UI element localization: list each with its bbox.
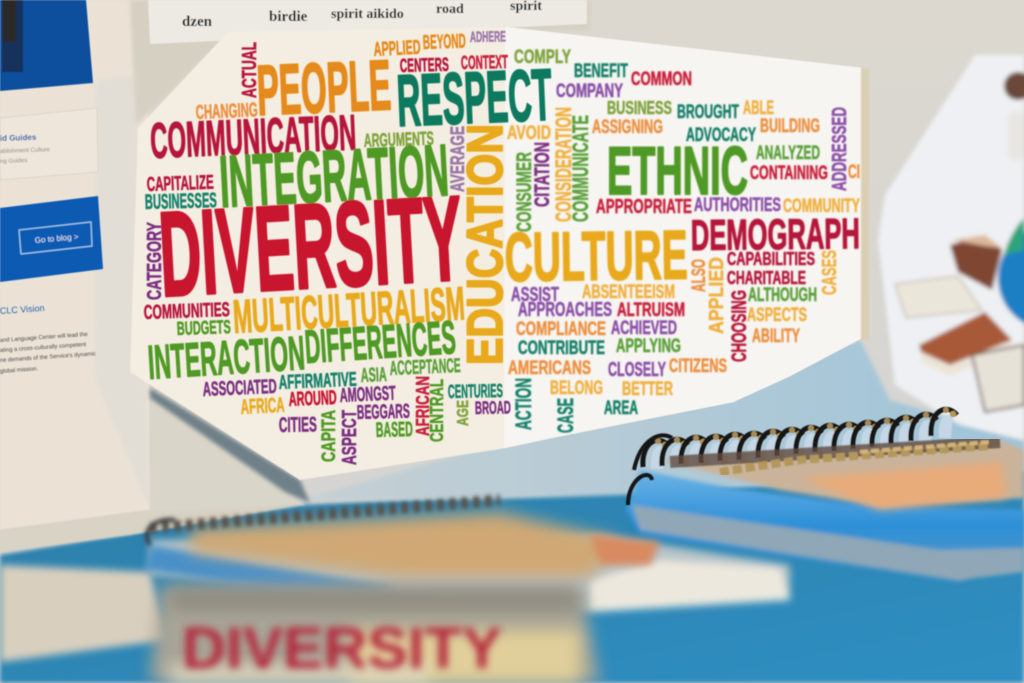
word: BROAD: BROAD — [475, 397, 511, 418]
word: BEYOND: BEYOND — [422, 31, 466, 54]
word cloud: left half — [143, 28, 554, 465]
shaded wall below poster — [300, 340, 1024, 500]
word: ETHNIC: ETHNIC — [607, 133, 748, 209]
word: CENTRAL: CENTRAL — [427, 379, 447, 442]
vision text: global mission. — [0, 366, 39, 375]
word: CONSIDERATION: CONSIDERATION — [551, 107, 576, 222]
word: EDUCATION: EDUCATION — [457, 124, 513, 365]
word: ADDRESSED: ADDRESSED — [829, 107, 851, 191]
word: ADHERE: ADHERE — [470, 28, 506, 46]
blurred word: DIVERSITY: DIVERSITY — [182, 616, 502, 681]
word: AMERICANS: AMERICANS — [508, 358, 591, 379]
word: CITIES: CITIES — [279, 413, 317, 437]
word: BELONG: BELONG — [550, 378, 603, 399]
word: AVERAGE: AVERAGE — [448, 126, 469, 192]
word cloud: left half: INTERACTION — [146, 327, 306, 390]
word: BUILDING: BUILDING — [760, 116, 820, 137]
right spiral notebook — [626, 407, 1024, 582]
icon: open white book — [895, 276, 982, 318]
word: CASES: CASES — [819, 250, 841, 295]
word: CLOSELY: CLOSELY — [608, 359, 666, 381]
word: ASSOCIATED: ASSOCIATED — [202, 376, 277, 401]
word: COMMUNITIES: COMMUNITIES — [143, 299, 230, 324]
word cloud: left half: DIVERSITY — [156, 171, 466, 322]
word cloud: left half: DIFFERENCES — [303, 310, 457, 373]
word: CONTRIBUTE: CONTRIBUTE — [518, 338, 605, 359]
word: ABILITY: ABILITY — [752, 326, 800, 347]
blog button panel: Go to blog > — [34, 232, 79, 245]
word: CHANGING: CHANGING — [195, 99, 258, 124]
word: CHOOSING: CHOOSING — [728, 290, 751, 362]
word: ASSIGNING: ASSIGNING — [592, 117, 663, 138]
word: COMMUNITY: COMMUNITY — [783, 196, 860, 217]
word: AMONGST: AMONGST — [339, 383, 396, 407]
word: CENTURIES: CENTURIES — [448, 381, 503, 403]
word: AGE: AGE — [455, 400, 472, 426]
word: APPROACHES: APPROACHES — [518, 299, 612, 321]
word: COMPANY: COMPANY — [556, 81, 623, 102]
label strip of names: road — [436, 2, 464, 17]
word: CONSUMER: CONSUMER — [513, 152, 536, 232]
word: AREA: AREA — [604, 398, 638, 419]
word: ABLE: ABLE — [743, 98, 774, 119]
word: ASPECT: ASPECT — [339, 410, 361, 465]
vision text: ne demands of the Service's dynamic — [0, 351, 96, 364]
word: AVOID: AVOID — [507, 123, 551, 144]
word: AROUND: AROUND — [288, 387, 337, 411]
word: CAPITA: CAPITA — [319, 410, 340, 462]
word: BROUGHT: BROUGHT — [677, 102, 739, 123]
label strip of names: spirit aikido — [331, 7, 404, 22]
icon: red book — [919, 312, 1012, 376]
word cloud: left half: COMMUNICATION — [149, 104, 357, 169]
word: CONTAINING: CONTAINING — [750, 163, 828, 184]
icon: person — [1004, 72, 1024, 160]
word: APPROPRIATE: APPROPRIATE — [596, 196, 692, 218]
word: CENTERS: CENTERS — [400, 55, 449, 77]
guides box — [0, 108, 98, 180]
foreground notebook with blurred red title — [150, 585, 600, 683]
word: BEGGARS: BEGGARS — [357, 401, 410, 424]
word: ALTHOUGH: ALTHOUGH — [748, 285, 817, 306]
label strip of names — [148, 0, 587, 44]
blue cover stripe — [145, 545, 400, 600]
word: ACTUAL: ACTUAL — [239, 42, 261, 98]
spiral coils — [643, 407, 957, 469]
icon: green globe land — [1004, 218, 1024, 255]
word: BASED: BASED — [376, 418, 413, 442]
text: RESPECT — [395, 55, 554, 142]
foreground beige sheet, blurred — [0, 565, 168, 662]
vision text: and Language Center will lead the — [0, 332, 88, 344]
word: BUSINESSES: BUSINESSES — [145, 189, 217, 214]
vision text: CLC Vision — [0, 303, 45, 316]
word: AFRICA: AFRICA — [240, 394, 285, 419]
word: DEMOGRAPH: DEMOGRAPH — [691, 210, 860, 260]
word: CAPITALIZE: CAPITALIZE — [146, 172, 214, 196]
vision text — [0, 303, 96, 375]
word: ARGUMENTS: ARGUMENTS — [363, 129, 434, 152]
orange patch — [590, 535, 660, 565]
word: ANALYZED: ANALYZED — [756, 143, 820, 164]
word cloud: left half: MULTICULTURALISM — [231, 276, 466, 343]
large end coil — [628, 435, 672, 505]
icon: globe — [998, 226, 1024, 330]
word: APPLIED: APPLIED — [373, 37, 421, 61]
word: COMPLY: COMPLY — [514, 47, 571, 68]
word: ACCEPTANCE: ACCEPTANCE — [389, 355, 461, 380]
blog button panel — [0, 196, 103, 282]
panel: right poster with books and globe — [878, 55, 1024, 440]
word: CATEGORY: CATEGORY — [144, 222, 166, 300]
word: COMPLIANCE: COMPLIANCE — [516, 319, 606, 340]
word: COMMON: COMMON — [631, 69, 692, 90]
label strip of names: birdie — [269, 9, 308, 25]
blurred coil row — [147, 500, 500, 545]
word: BUSINESS: BUSINESS — [607, 98, 672, 118]
icon: standing book — [972, 345, 1024, 412]
blue table surface — [0, 470, 1024, 683]
tan cover band — [190, 512, 620, 578]
word: AFRICAN: AFRICAN — [413, 376, 433, 436]
gold spiral wire row — [670, 442, 1000, 472]
word: CULTURE: CULTURE — [504, 216, 688, 296]
guides box: ng Guides — [0, 158, 27, 165]
word: BUDGETS: BUDGETS — [176, 317, 231, 340]
word: CI: CI — [848, 162, 860, 183]
word: ABSENTEEISM: ABSENTEEISM — [582, 282, 675, 303]
word: CHARITABLE: CHARITABLE — [727, 268, 806, 288]
word: AFFIRMATIVE: AFFIRMATIVE — [278, 369, 357, 394]
icon: book brown — [950, 235, 1002, 290]
word: ASPECTS: ASPECTS — [747, 305, 807, 326]
word: BETTER: BETTER — [622, 379, 673, 400]
word: ADVOCACY: ADVOCACY — [686, 125, 756, 146]
orange paper on notebook — [800, 462, 1006, 510]
word: CAPABILITIES: CAPABILITIES — [727, 249, 815, 269]
word: CASE: CASE — [553, 398, 578, 433]
word: AUTHORITIES: AUTHORITIES — [694, 195, 781, 216]
word: APPLIED vertical: APPLIED — [706, 257, 728, 334]
word cloud: left half: PEOPLE — [255, 46, 393, 131]
word: ACTION: ACTION — [511, 378, 536, 430]
lower poster backing paper — [0, 505, 300, 552]
vision text: ating a cross-culturally competent — [0, 342, 87, 354]
word: ALSO: ALSO — [689, 259, 710, 292]
word: COMMUNICATE: COMMUNICATE — [568, 115, 593, 222]
taped corner behind poster — [130, 0, 590, 510]
word: CITATION: CITATION — [531, 142, 554, 207]
guides box: ablishment Culture — [0, 147, 51, 155]
word: ACHIEVED: ACHIEVED — [611, 318, 677, 339]
word: ALTRUISM: ALTRUISM — [617, 300, 685, 321]
word: ASIA: ASIA — [360, 364, 387, 387]
word: ASSIST: ASSIST — [511, 284, 559, 306]
guides box: id Guides — [0, 133, 37, 143]
word: CONTEXT: CONTEXT — [461, 52, 508, 74]
left spiral notebook, blurred — [145, 500, 790, 612]
word cloud: left half: INTEGRATION — [218, 130, 451, 223]
panel: left info sheet — [0, 0, 150, 530]
word: BENEFIT: BENEFIT — [574, 61, 628, 82]
word: APPLYING: APPLYING — [616, 336, 681, 357]
blue banner with clip — [0, 0, 93, 91]
word cloud: right half — [504, 47, 860, 433]
translucent tape strip — [95, 75, 150, 510]
label strip of names: dzen — [182, 14, 213, 30]
blue notebook body — [626, 440, 1024, 582]
panel: word cloud poster paper — [130, 27, 869, 480]
word: CITIZENS: CITIZENS — [669, 356, 727, 377]
